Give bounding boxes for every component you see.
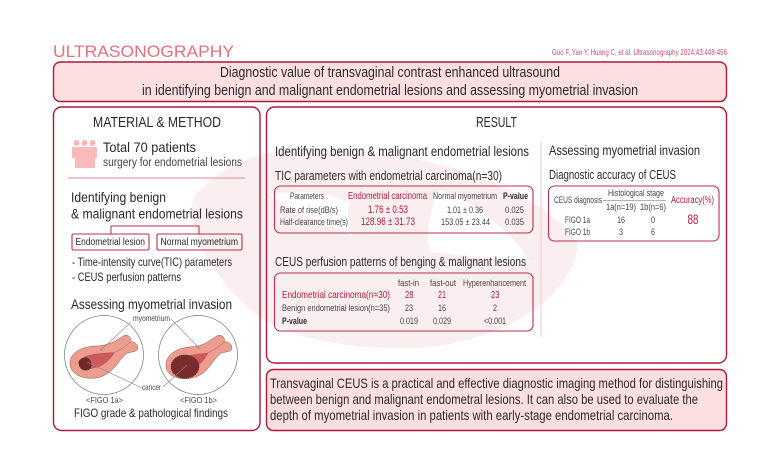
panel: conclusion	[266, 370, 726, 430]
panel: conclusion: depth of myometrial invasion in patients with early-stage endometrial carcinoma.	[270, 407, 673, 423]
table: CEUS perfusion patterns: Benign endometrial lesion(n=35)	[282, 303, 390, 314]
table: TIC parameters: Half-clearance time(s)	[280, 217, 348, 228]
icon: patients	[72, 140, 97, 168]
table: TIC parameters: 0.035	[505, 217, 524, 228]
journal name: ULTRASONOGRAPHY	[53, 43, 234, 61]
table: diagnostic accuracy: 88	[688, 211, 699, 227]
table: CEUS perfusion patterns: 0.029	[433, 316, 451, 327]
table: CEUS perfusion patterns: fast-out	[430, 278, 456, 289]
label: myometrium: myometrium	[133, 313, 170, 323]
illustration: FIGO 1b uterus	[158, 316, 238, 394]
table: TIC parameters: Rate of rise(dB/s)	[280, 205, 338, 216]
table heading: diagnostic accuracy: Diagnostic accuracy of CEUS	[549, 167, 676, 182]
table: diagnostic accuracy: 1a(n=19)	[606, 202, 636, 213]
subheading: identifying lesions: Identifying benign	[71, 189, 166, 205]
subheading: assessing invasion: Assessing myometrial invasion	[71, 296, 232, 312]
table: diagnostic accuracy: 3	[619, 227, 623, 238]
patient count: Total 70 patients	[103, 139, 196, 155]
table: TIC parameters: 0.025	[505, 205, 524, 216]
table: CEUS perfusion patterns: Hyperenhancement	[463, 278, 526, 289]
table: TIC parameters: Normal myometrium	[433, 191, 497, 202]
table: diagnostic accuracy: FIGO 1b	[565, 227, 590, 238]
table: diagnostic accuracy: 6	[651, 227, 655, 238]
connector between boxes	[111, 226, 199, 234]
patient count	[103, 139, 242, 169]
subheading: identifying lesions: & malignant endometrial lesions	[71, 206, 243, 222]
table: TIC parameters: Endometrial carcinoma	[348, 191, 427, 202]
title banner	[54, 62, 726, 102]
subheading: identifying lesions	[71, 189, 243, 222]
box: endometrial lesion: Endometrial lesion	[76, 236, 145, 248]
table: diagnostic accuracy	[548, 186, 719, 241]
panel: material and method	[54, 107, 260, 430]
subheading: identifying lesions: Identifying benign & malignant endometrial lesions	[275, 143, 529, 159]
table: TIC parameters: 1.76 ± 0.53	[368, 204, 408, 216]
heading: result: RESULT	[476, 114, 517, 131]
box: normal myometrium	[157, 234, 242, 250]
heading: material and method: MATERIAL & METHOD	[93, 114, 221, 131]
label: cancer: cancer	[142, 382, 161, 392]
title banner: Diagnostic value of transvaginal contrast enhanced ultrasound	[220, 65, 560, 81]
subheading: assessing invasion: Assessing myometrial invasion	[549, 142, 700, 158]
table: CEUS perfusion patterns: 0.019	[400, 316, 418, 327]
box: endometrial lesion	[72, 234, 149, 250]
panel: result	[266, 107, 726, 363]
table: CEUS perfusion patterns: Endometrial carcinoma(n=30)	[282, 289, 390, 301]
table: diagnostic accuracy: 1b(n=6)	[640, 202, 666, 213]
table: diagnostic accuracy: 0	[651, 215, 655, 226]
table: diagnostic accuracy: CEUS diagnosis	[554, 195, 602, 206]
table: CEUS perfusion patterns: 2	[493, 303, 497, 314]
table: CEUS perfusion patterns: P-value	[282, 316, 307, 327]
table: TIC parameters: 128.96 ± 31.73	[361, 216, 415, 228]
table: diagnostic accuracy: Histological stage	[608, 188, 664, 199]
table: TIC parameters: Parameters	[290, 191, 324, 202]
table: CEUS perfusion patterns	[274, 273, 533, 331]
method list: - CEUS perfusion patterns	[72, 270, 181, 284]
table: CEUS perfusion patterns: 21	[438, 289, 446, 301]
table: CEUS perfusion patterns: <0.001	[484, 316, 506, 327]
table: TIC parameters: 1.01 ± 0.36	[447, 205, 483, 216]
table: CEUS perfusion patterns: 28	[405, 289, 414, 301]
box: normal myometrium: Normal myometrium	[160, 236, 238, 248]
table heading: CEUS perfusion: CEUS perfusion patterns of benging & malignant lesions	[275, 254, 526, 269]
table: CEUS perfusion patterns: fast-in	[398, 278, 419, 289]
table heading: TIC: TIC parameters with endometrial carcinoma(n=30)	[275, 168, 502, 183]
table: TIC parameters: P-value	[503, 191, 528, 202]
illustration: FIGO 1a uterus	[64, 316, 144, 394]
table: TIC parameters	[274, 186, 533, 233]
table: diagnostic accuracy: 16	[617, 215, 625, 226]
table: TIC parameters: 153.05 ± 23.44	[441, 217, 490, 228]
table: CEUS perfusion patterns: 16	[438, 303, 446, 314]
table: CEUS perfusion patterns: 23	[405, 303, 413, 314]
method list	[72, 255, 232, 284]
label: FIGO 1b: <FIGO 1b>	[180, 395, 217, 405]
table: diagnostic accuracy: FIGO 1a	[565, 215, 590, 226]
table: diagnostic accuracy: Accuracy(%)	[671, 195, 714, 206]
caption: FIGO grade: FIGO grade & pathological findings	[74, 406, 228, 420]
patient count: surgery for endometrial lesions	[103, 157, 242, 169]
label: FIGO 1a: <FIGO 1a>	[86, 395, 123, 405]
background swoosh watermark	[192, 149, 578, 348]
title banner: in identifying benign and malignant endometrial lesions and assessing myometrial invasion	[142, 83, 638, 99]
table: CEUS perfusion patterns: 23	[491, 289, 500, 301]
leader lines	[87, 319, 200, 388]
method list: - Time-intensity curve(TIC) parameters	[72, 255, 232, 269]
